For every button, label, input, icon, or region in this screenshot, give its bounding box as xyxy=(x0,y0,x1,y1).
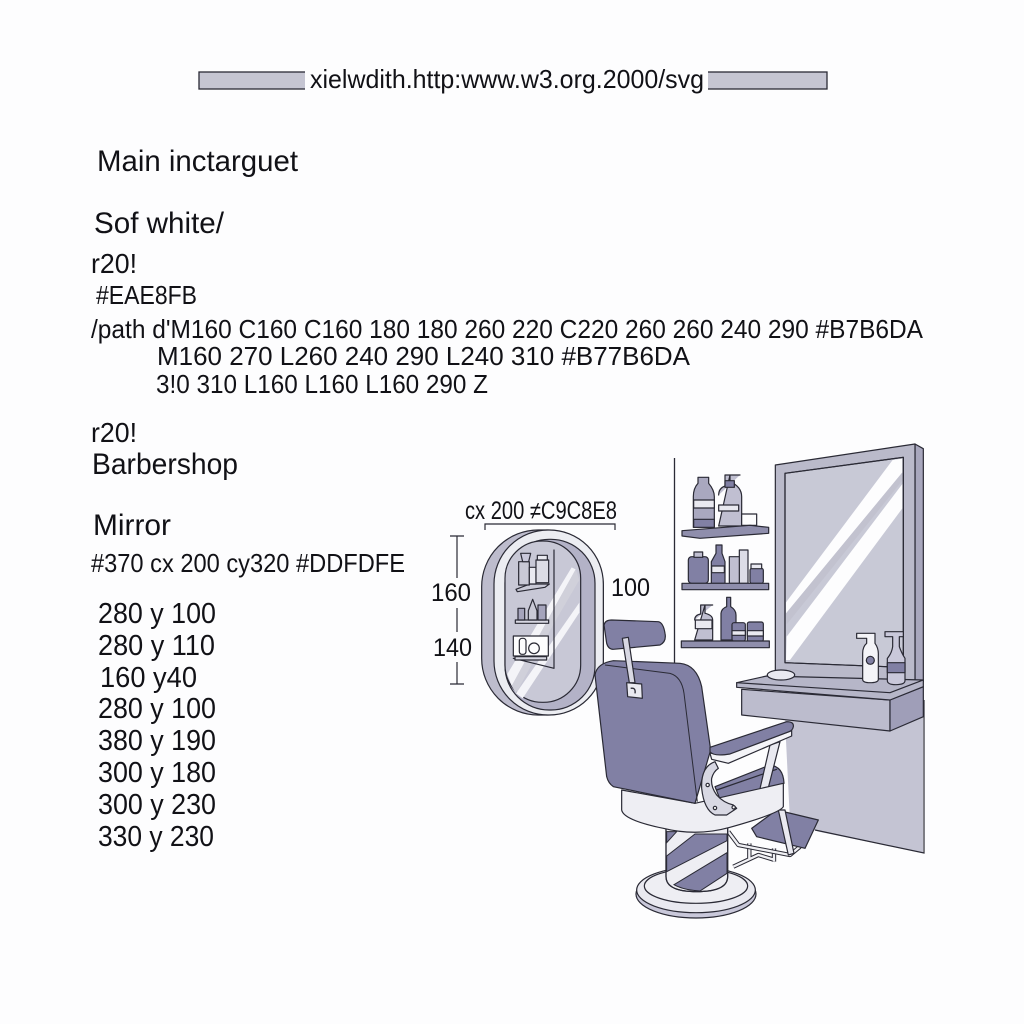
text: path code block: 3!0 310 L160 L160 L160 290 Z xyxy=(156,369,488,399)
chair back xyxy=(595,637,711,803)
wall divider line xyxy=(674,458,676,664)
text: mirror heading: Mirror xyxy=(93,509,171,542)
vanity counter with products xyxy=(737,632,923,731)
dimension annotations: 140 xyxy=(433,634,472,662)
lower wall panel xyxy=(785,700,924,853)
text: barbershop heading: Barbershop xyxy=(92,448,238,481)
text: coordinate list: 300 y 230 xyxy=(98,789,216,821)
pump bottle white xyxy=(857,633,878,683)
title bar: xielwdith.http:www.w3.org.2000/svg xyxy=(310,64,704,94)
footrest xyxy=(728,810,818,867)
dimension annotations: cx 200 ≠C9C8E8 xyxy=(465,497,617,525)
bottom shelf xyxy=(681,597,769,648)
large wall mirror xyxy=(775,444,923,682)
text: coordinate list: 280 y 100 xyxy=(98,693,216,725)
seat cushion xyxy=(715,765,784,803)
dimension annotations xyxy=(431,497,650,684)
text: coordinate list: 160 y40 xyxy=(100,662,197,694)
armrest xyxy=(710,722,793,763)
text: coordinate list: 280 y 100 xyxy=(98,598,216,630)
text: colour code: #EAE8FB xyxy=(96,280,197,310)
dimension annotations: 160 xyxy=(431,579,471,607)
mirror reflected shelves xyxy=(513,553,549,660)
top shelf xyxy=(682,475,769,538)
text: coordinate list: 330 y 230 xyxy=(98,821,214,853)
text: path code block: /path d'M160 C160 C160 180 180 260 220 C220 260 260 240 290 #B7B6DA xyxy=(91,314,924,344)
dimension annotations: 100 xyxy=(611,574,650,602)
text: coordinate list: 380 y 190 xyxy=(98,725,216,757)
striped column xyxy=(666,827,728,892)
seat shell xyxy=(622,783,783,832)
text: soft white: Sof white/ xyxy=(94,207,225,240)
text: mirror attributes: #370 cx 200 cy320 #DDFDFE xyxy=(91,548,405,578)
title bar xyxy=(199,64,827,94)
text: coordinate list: 280 y 110 xyxy=(98,630,215,662)
metal arm bracket xyxy=(702,762,737,815)
pump bottle dark xyxy=(885,632,905,685)
text: r20 second: r20! xyxy=(91,417,137,448)
base xyxy=(636,867,756,918)
text: coordinate list: 300 y 180 xyxy=(98,757,216,789)
arm support strut xyxy=(759,742,780,792)
headrest xyxy=(604,620,665,649)
middle shelf xyxy=(682,545,769,590)
text: path code block xyxy=(91,314,924,399)
soap dish xyxy=(767,670,795,680)
wall shelves with bottles xyxy=(681,475,769,648)
oval wall mirror xyxy=(482,530,603,715)
barber chair xyxy=(595,620,818,918)
text: r20: r20! xyxy=(91,248,137,279)
text: coordinate list xyxy=(98,598,216,853)
text: main heading: Main inctarguet xyxy=(97,145,299,178)
text: path code block: M160 270 L260 240 290 L240 310 #B77B6DA xyxy=(157,341,691,371)
